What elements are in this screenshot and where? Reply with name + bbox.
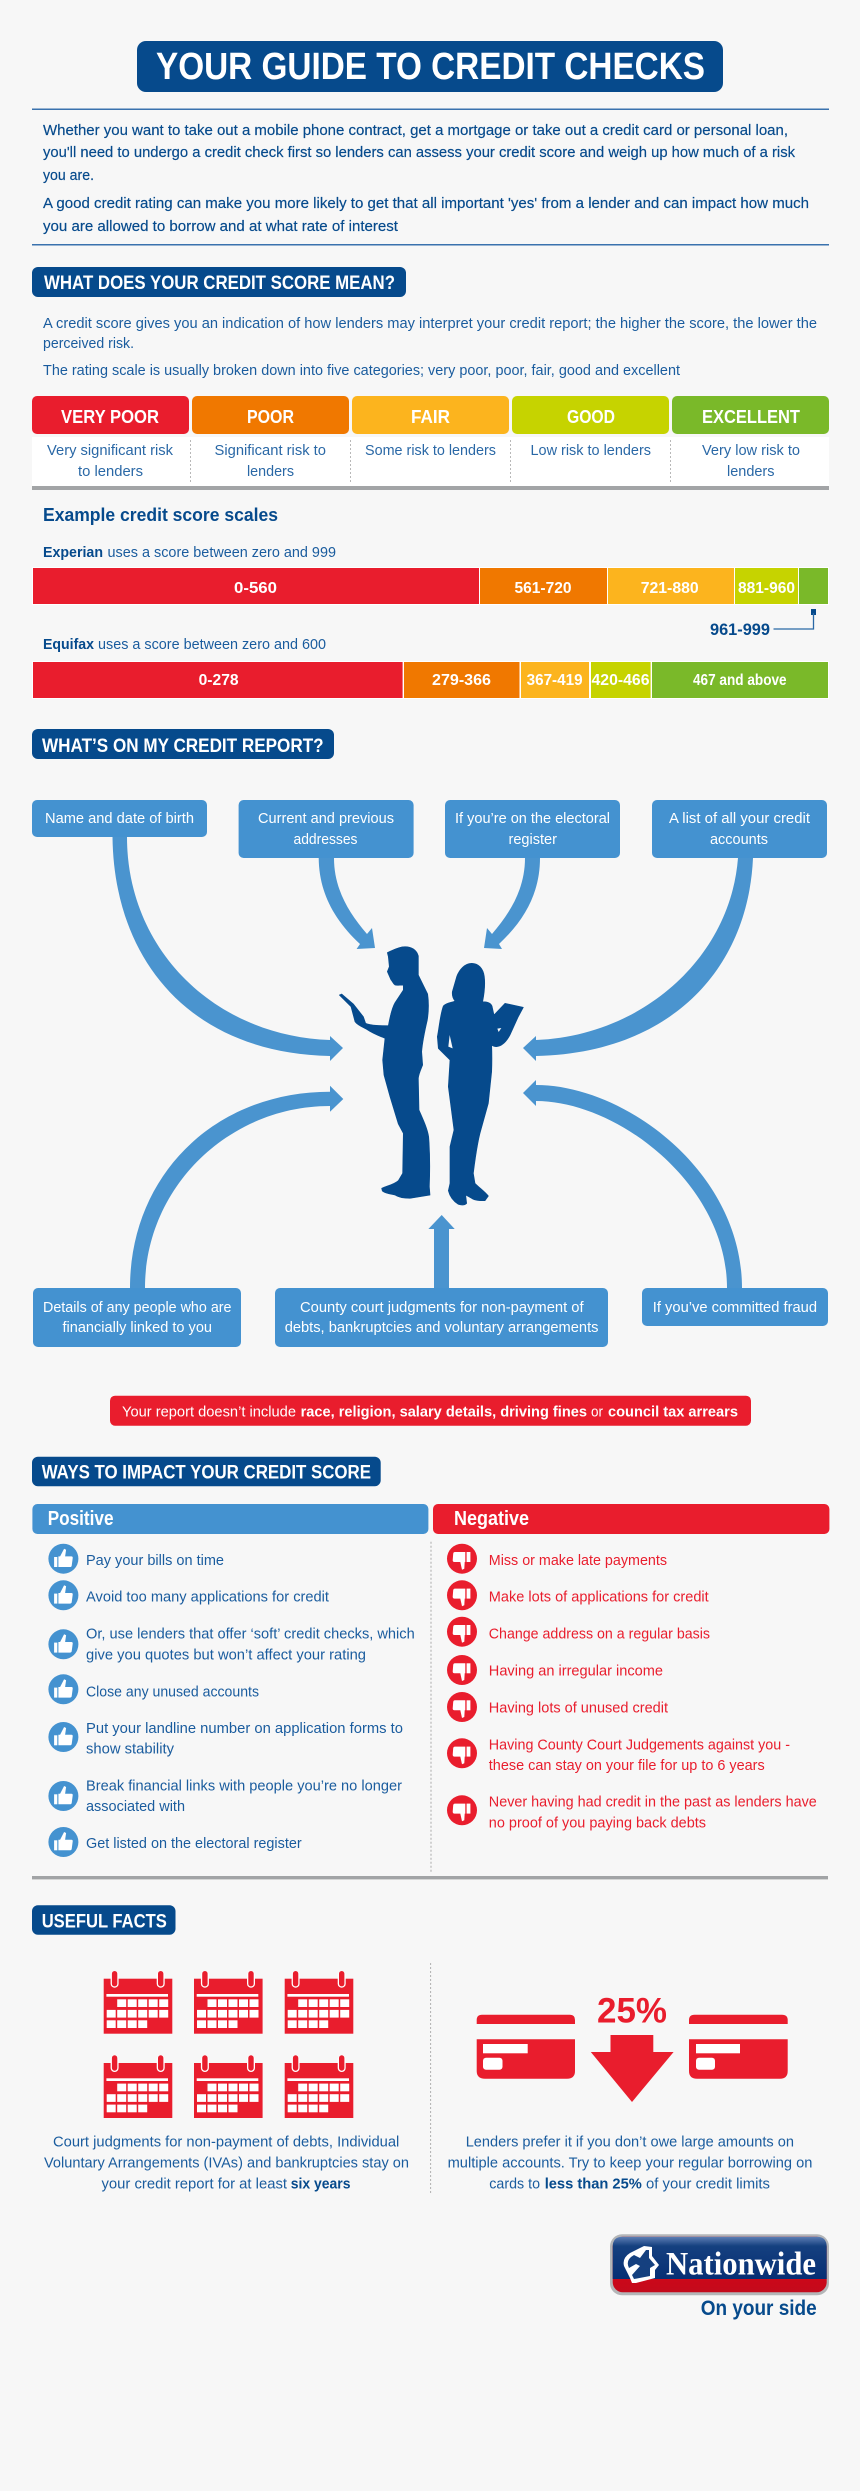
25 percent fact text: cards to — [489, 2175, 540, 2192]
negative header: Negative — [454, 1508, 529, 1530]
box: fraud — [642, 1288, 828, 1326]
category: fair: FAIR — [411, 406, 450, 427]
experian scale bar — [32, 567, 829, 605]
item: landline — [48, 1720, 403, 1758]
icon: house emblem — [624, 2246, 659, 2283]
item: financial links — [48, 1778, 402, 1815]
item: applications — [48, 1580, 330, 1610]
box: name and date of birth: Name and date of birth — [45, 810, 194, 827]
item: late payments — [447, 1544, 667, 1574]
credit score description — [43, 315, 817, 379]
red exclusions banner: race, religion, salary details, driving fines — [301, 1404, 587, 1421]
six years fact text: your credit report for at least — [102, 2175, 288, 2192]
25 percent fact text — [448, 2134, 812, 2192]
credit score description: A credit score gives you an indication of how lenders may interpret your credit report; the higher the score, the lower the — [43, 315, 817, 332]
item: county court judgements — [447, 1736, 790, 1774]
negative header — [433, 1504, 829, 1534]
item: financial links: Break financial links with people you’re no longer — [86, 1778, 402, 1795]
box: financially linked people: Details of any people who are — [43, 1299, 232, 1316]
category: poor: Significant risk to — [214, 442, 326, 459]
intro text: A good credit rating can make you more likely to get that all important 'yes' from a lender and can impact how much — [43, 195, 809, 212]
experian scale bar: 721-880 — [641, 580, 699, 597]
category: excellent: EXCELLENT — [702, 406, 801, 427]
item: change address — [447, 1617, 710, 1647]
heading: ways to impact your credit score — [32, 1457, 381, 1486]
item: landline: show stability — [86, 1741, 174, 1758]
logo: Nationwide — [610, 2234, 829, 2320]
category: excellent: lenders — [727, 463, 774, 480]
category: excellent: Very low risk to — [702, 442, 800, 459]
intro text — [43, 122, 809, 235]
red exclusions banner: or — [591, 1404, 603, 1421]
category: good: Low risk to lenders — [530, 442, 651, 459]
six years fact text: Voluntary Arrangements (IVAs) and bankruptcies stay on — [44, 2154, 409, 2171]
box: electoral register: If you’re on the electoral — [455, 810, 610, 827]
box: addresses: Current and previous — [258, 810, 394, 827]
experian scale bar: 561-720 — [514, 580, 572, 597]
experian label: uses a score between zero and 999 — [108, 544, 336, 561]
category: very poor: Very significant risk — [47, 442, 173, 459]
experian scale bar: 0-560 — [234, 580, 277, 597]
item: unused credit: Having lots of unused credit — [489, 1699, 669, 1716]
callout: 961-999: 961-999 — [710, 621, 770, 639]
heading: useful facts — [32, 1905, 176, 1935]
item: applications: Avoid too many applications for credit — [86, 1589, 330, 1606]
item: no credit history — [447, 1794, 817, 1831]
25 percent fact text: of your credit limits — [646, 2175, 770, 2192]
box: credit accounts: A list of all your credit — [669, 810, 811, 827]
intro text: you are. — [43, 167, 94, 184]
item: irregular income: Having an irregular income — [489, 1663, 663, 1680]
experian label: Experian — [43, 544, 103, 561]
category: good: GOOD — [567, 406, 615, 427]
icons: six calendars — [104, 1971, 353, 2118]
heading: useful facts: USEFUL FACTS — [42, 1910, 167, 1932]
item: bills — [48, 1544, 224, 1574]
item: no credit history: no proof of you paying back debts — [489, 1814, 706, 1831]
icon: credit card right — [689, 2015, 788, 2079]
credit score description: The rating scale is usually broken down into five categories; very poor, poor, fair, good and excellent — [43, 362, 681, 379]
category: very poor: to lenders — [78, 463, 143, 480]
box: electoral register: register — [508, 831, 557, 848]
box: credit accounts: accounts — [710, 831, 768, 848]
box: financially linked people — [33, 1288, 241, 1347]
equifax scale bar: 420-466 — [592, 672, 650, 689]
logo: Nationwide: Nationwide — [666, 2247, 816, 2283]
report items: top row — [32, 800, 827, 858]
silhouette: man and woman — [339, 947, 523, 1205]
category: fair: Some risk to lenders — [365, 442, 496, 459]
equifax scale bar — [32, 661, 829, 699]
25 percent fact text: Lenders prefer it if you don’t owe large amounts on — [466, 2134, 794, 2151]
item: unused accounts: Close any unused accounts — [86, 1683, 259, 1700]
category: poor — [192, 396, 349, 480]
arrow: fraud — [523, 1080, 742, 1288]
box: county court judgments: debts, bankruptcies and voluntary arrangements — [285, 1319, 598, 1336]
heading: what does your credit score mean — [32, 267, 406, 297]
credit score description: perceived risk. — [43, 335, 134, 352]
item: lots of applications: Make lots of applications for credit — [489, 1589, 709, 1606]
red exclusions banner: Your report doesn’t include — [122, 1404, 296, 1421]
equifax label: uses a score between zero and 600 — [98, 636, 326, 653]
item: soft checks: Or, use lenders that offer ‘soft’ credit checks, which — [86, 1625, 415, 1642]
red exclusions banner: council tax arrears — [608, 1404, 738, 1421]
six years fact text — [44, 2134, 409, 2192]
silhouette: man — [339, 947, 430, 1198]
six years fact text: six years — [291, 2175, 350, 2192]
equifax scale bar: 0-278 — [199, 672, 239, 689]
arrow: electoral register — [484, 858, 540, 949]
item: late payments: Miss or make late payments — [489, 1552, 667, 1569]
arrow: name and date of birth — [112, 837, 343, 1061]
category: poor: lenders — [247, 463, 294, 480]
item: financial links: associated with — [86, 1798, 185, 1815]
25 percent label: 25% — [597, 1992, 667, 2031]
box: addresses: addresses — [294, 831, 358, 848]
category: fair — [352, 396, 509, 459]
heading: what does your credit score mean: WHAT DOES YOUR CREDIT SCORE MEAN? — [44, 272, 395, 294]
heading: ways to impact your credit score: WAYS TO IMPACT YOUR CREDIT SCORE — [42, 1462, 371, 1484]
item: landline: Put your landline number on application forms to — [86, 1720, 403, 1737]
box: financially linked people: financially linked to you — [62, 1319, 212, 1336]
icon: credit card left — [477, 2015, 575, 2079]
equifax scale bar: 367-419 — [527, 672, 583, 689]
box: addresses — [239, 800, 414, 858]
box: credit accounts — [652, 800, 827, 858]
positive header: Positive — [48, 1508, 114, 1530]
red exclusions banner — [110, 1396, 751, 1426]
item: no credit history: Never having had credit in the past as lenders have — [489, 1794, 817, 1811]
box: fraud: If you’ve committed fraud — [653, 1299, 817, 1316]
positive header — [32, 1504, 428, 1534]
item: soft checks: give you quotes but won’t affect your rating — [86, 1646, 366, 1663]
item: county court judgements: Having County Court Judgements against you - — [489, 1736, 790, 1753]
intro text: Whether you want to take out a mobile phone contract, get a mortgage or take out a credit card or personal loan, — [43, 122, 788, 139]
item: soft checks — [48, 1625, 415, 1663]
arrow: credit accounts — [523, 858, 753, 1061]
item: irregular income — [447, 1655, 663, 1685]
panel: positive — [32, 1504, 428, 1857]
25 percent fact text: multiple accounts. Try to keep your regular borrowing on — [448, 2154, 812, 2171]
six years fact text: Court judgments for non-payment of debts, Individual — [53, 2134, 399, 2151]
item: bills: Pay your bills on time — [86, 1552, 224, 1569]
category: poor: POOR — [247, 406, 294, 427]
item: county court judgements: these can stay on your file for up to 6 years — [489, 1757, 765, 1774]
item: change address: Change address on a regular basis — [489, 1626, 710, 1643]
box: county court judgments — [275, 1288, 608, 1347]
item: electoral register — [48, 1827, 302, 1857]
box: county court judgments: County court judgments for non-payment of — [300, 1299, 584, 1316]
item: electoral register: Get listed on the electoral register — [86, 1835, 302, 1852]
box: electoral register — [445, 800, 620, 858]
equifax label: Equifax — [43, 636, 95, 653]
arrow: addresses — [319, 858, 375, 949]
arrow: county court judgments — [428, 1215, 455, 1288]
title: YOUR GUIDE TO CREDIT CHECKS — [156, 46, 705, 88]
arrow: financially linked people — [130, 1086, 343, 1288]
heading: what's on my credit report: WHAT’S ON MY CREDIT REPORT? — [42, 735, 324, 757]
category: good — [512, 396, 669, 459]
intro text: you are allowed to borrow and at what rate of interest — [43, 218, 399, 235]
icon: down arrow — [591, 2035, 674, 2102]
heading: what's on my credit report — [32, 729, 334, 759]
tagline: On your side — [701, 2297, 817, 2320]
25 percent fact text: less than 25% — [545, 2175, 642, 2192]
item: lots of applications — [447, 1580, 709, 1610]
category: very poor: VERY POOR — [61, 406, 159, 427]
example scales heading: Example credit score scales — [43, 505, 278, 525]
silhouette: woman — [437, 963, 523, 1205]
equifax scale bar: 467 and above — [693, 672, 787, 689]
report items: bottom row — [33, 1288, 828, 1347]
intro text: you'll need to undergo a credit check first so lenders can assess your credit score and weigh up how much of a risk — [43, 144, 795, 161]
rating categories panel — [32, 396, 829, 490]
category: very poor — [32, 396, 189, 480]
category: excellent — [672, 396, 829, 480]
item: unused credit — [447, 1692, 669, 1722]
experian scale bar: 881-960 — [738, 580, 795, 597]
box: name and date of birth — [32, 800, 207, 837]
callout: 961-999 — [710, 609, 816, 639]
panel: negative — [433, 1504, 829, 1831]
item: unused accounts — [48, 1674, 259, 1704]
equifax scale bar: 279-366 — [432, 672, 491, 689]
